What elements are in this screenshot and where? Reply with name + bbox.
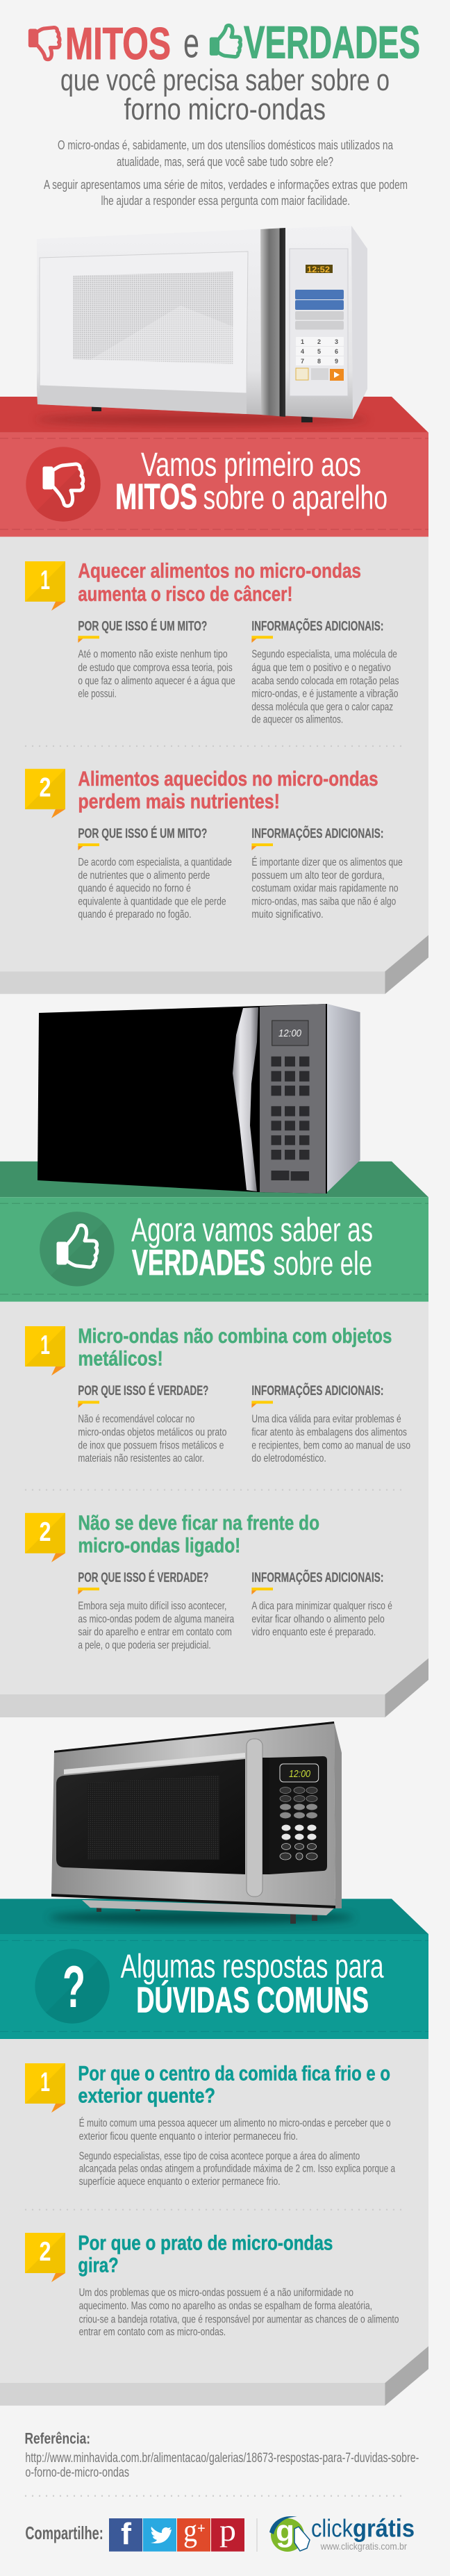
verdade 2: Embora seja muito difícil isso acontecer, (78, 1601, 226, 1612)
title: MITOS (65, 18, 171, 69)
verdade 1: metálicos! (78, 1348, 163, 1370)
mito 2: É importante dizer que os alimentos que (251, 855, 403, 868)
panel: verdades tabletop (0, 1162, 428, 1197)
mito 1: de aquecer os alimentos. (251, 714, 343, 726)
mito 2: equivalente à quantidade que ele perde (78, 895, 226, 907)
badge 2: 2 (39, 1517, 51, 1547)
microwave: white: 4 (301, 348, 304, 355)
mito 1: Aquecer alimentos no micro-ondas (78, 560, 361, 583)
mito 2 (25, 768, 403, 920)
badge 2 (25, 769, 65, 818)
icon: question circle (35, 1949, 110, 2024)
panel: mitos tabletop (0, 397, 428, 433)
panel: duvidas tabletop (0, 1899, 428, 1934)
icon: question circle: ? (62, 1954, 85, 2020)
panel: mitos header band: MITOS (115, 477, 197, 518)
verdade 1: do eletrodoméstico. (251, 1453, 326, 1464)
mito 1: água que tem o positivo e o negativo (251, 662, 391, 674)
title: forno micro-ondas (124, 92, 326, 126)
intro text (44, 138, 408, 208)
logo: clickgratis: g (276, 2514, 294, 2548)
mito 2: perdem mais nutrientes! (78, 790, 280, 813)
verdade 2: vidro enquanto este é preparado. (251, 1626, 376, 1638)
verdade 1: POR QUE ISSO É VERDADE? (78, 1382, 208, 1398)
panel: verdades header band: sobre ele (273, 1246, 372, 1282)
duvida 1: exterior ficou quente enquanto o interior permaneceu frio. (79, 2131, 298, 2142)
badge 1 (25, 1326, 65, 1376)
icon: google plus: + (197, 2521, 206, 2536)
microwave: white: 9 (335, 358, 338, 365)
microwave: white (35, 226, 368, 426)
panel: verdades header band: VERDADES (132, 1243, 265, 1283)
badge 1: 1 (40, 565, 50, 595)
verdade 2: POR QUE ISSO É VERDADE? (78, 1569, 208, 1585)
panel: duvidas content (0, 2039, 428, 2406)
icon: facebook: f (121, 2517, 131, 2551)
verdade 2: A dica para minimizar qualquer risco é (251, 1601, 392, 1612)
mito 1: INFORMAÇÕES ADICIONAIS: (251, 617, 383, 634)
mito 2: possuem um alto teor de gordura, (251, 870, 385, 882)
mito 1: dessa molécula que gera o calor capaz (251, 701, 393, 713)
microwave: white: 3 (335, 338, 338, 345)
mito 2: muito significativo. (251, 909, 324, 920)
verdade 1: Não é recomendável colocar no (78, 1414, 194, 1426)
badge 2 (25, 2233, 65, 2282)
mito 2: costumam oxidar mais rapidamente no (251, 883, 399, 895)
icon: thumb up circle (40, 1212, 115, 1287)
microwave: black: 12:00 (278, 1027, 302, 1039)
intro text: atualidade, mas, será que você sabe tudo sobre ele? (117, 155, 333, 169)
icon: twitter (143, 2518, 176, 2552)
panel: mitos content (0, 537, 428, 994)
badge 1: 1 (40, 2067, 50, 2097)
verdade 2: as mico-ondas podem de alguma maneira (78, 1613, 234, 1625)
badge 2: 2 (39, 773, 51, 803)
mito 1 (25, 560, 399, 726)
microwave: white: 8 (317, 358, 321, 365)
microwave: stainless (49, 1722, 354, 1924)
icon: thumb down circle (26, 447, 101, 522)
share (25, 2513, 244, 2552)
microwave: white: 6 (335, 348, 338, 355)
mito 1: Até o momento não existe nenhum tipo (78, 649, 228, 661)
mito 1: aumenta o risco de câncer! (78, 583, 292, 606)
mito 1: micro-ondas, e é justamente a vibração (251, 688, 398, 700)
microwave: white: 5 (317, 348, 321, 355)
mito 2: quando é aquecido no forno é (78, 883, 191, 895)
mito 1: Segundo especialista, uma molécula de (251, 649, 397, 661)
duvida 1: superfície aquece enquanto o exterior permanece frio. (79, 2176, 281, 2188)
panel: verdades content (0, 1302, 428, 1717)
verdade 1: INFORMAÇÕES ADICIONAIS: (251, 1382, 383, 1398)
mito 1: de estudo que comprova essa teoria, pois (78, 662, 233, 674)
mito 2: quando é preparado no fogão. (78, 909, 192, 920)
mito 2: Alimentos aquecidos no micro-ondas (78, 768, 378, 791)
badge 1 (25, 2063, 65, 2113)
verdade 1: materiais não resistentes ao calor. (78, 1453, 204, 1464)
duvida 2: gira? (78, 2254, 119, 2277)
badge 2: 2 (39, 2237, 51, 2267)
mito 2: INFORMAÇÕES ADICIONAIS: (251, 825, 383, 841)
verdade 2: INFORMAÇÕES ADICIONAIS: (251, 1569, 383, 1585)
duvida 1: exterior quente? (78, 2085, 215, 2108)
panel: mitos header band: Vamos primeiro aos (141, 447, 361, 484)
reference: Referência: (25, 2430, 90, 2447)
duvida 2: entrar em contato com as micro-ondas. (79, 2326, 226, 2338)
microwave: white: 7 (301, 358, 304, 365)
duvida 2 (25, 2231, 399, 2338)
verdade 1 (25, 1325, 410, 1464)
verdade 2: a pele, o que poderia ser prejudicial. (78, 1640, 211, 1651)
mito 1: POR QUE ISSO É UM MITO? (78, 618, 207, 634)
icon: google plus (177, 2513, 210, 2552)
logo: clickgratis: www.clickgratis.com.br (320, 2541, 407, 2552)
verdade 1: micro-ondas objetos metálicos ou prato (78, 1427, 226, 1438)
duvida 2: Por que o prato de micro-ondas (78, 2231, 333, 2254)
badge 2 (25, 1513, 65, 1562)
title (31, 17, 420, 126)
mito 2: De acordo com especialista, a quantidade (78, 857, 232, 868)
icon: google plus: g (183, 2513, 197, 2548)
mito 2: micro-ondas, mas saiba que não é algo (251, 895, 396, 907)
badge 1 (25, 561, 65, 611)
logo: clickgratis: grátis (353, 2514, 415, 2543)
microwave: white: 12:52 (307, 265, 330, 274)
verdade 2: sair do aparelho e entrar em contato com (78, 1626, 232, 1638)
icon: facebook (109, 2517, 142, 2552)
panel: duvidas header band (0, 1934, 428, 2039)
mito 1: acaba sendo colocada em rotação pelas (251, 675, 399, 687)
share: Compartilhe: (25, 2523, 103, 2543)
reference: o-forno-de-micro-ondas (25, 2466, 129, 2480)
microwave: white: 2 (317, 338, 321, 345)
duvida 1 (25, 2062, 395, 2188)
verdade 2 (25, 1512, 392, 1651)
microwave: black (38, 1004, 360, 1194)
verdade 2: Não se deve ficar na frente do (78, 1512, 319, 1535)
intro text: lhe ajudar a responder essa pergunta com maior facilidade. (101, 194, 350, 208)
logo: clickgratis (269, 2514, 415, 2552)
verdade 1: Uma dica válida para evitar problemas é (251, 1414, 401, 1426)
badge 1: 1 (40, 1330, 50, 1360)
panel: mitos header band: sobre o aparelho (203, 480, 388, 517)
microwave: white: 1 (301, 338, 304, 345)
mito 1: o que faz o alimento aquecer é a água que (78, 675, 235, 687)
verdade 2: evitar ficar olhando o alimento pelo (251, 1613, 385, 1625)
icon: thumb down red (31, 28, 60, 60)
reference (25, 2430, 419, 2480)
mito 2: de nutrientes que o alimento perde (78, 870, 210, 882)
panel: mitos header band (0, 433, 428, 537)
verdade 2: micro-ondas ligado! (78, 1534, 240, 1557)
icon: pinterest: p (219, 2513, 236, 2548)
duvida 2: Um dos problemas que os micro-ondas possuem é a não uniformidade no (79, 2287, 353, 2299)
icon: pinterest (211, 2513, 244, 2552)
mito 1: ele possui. (78, 688, 117, 700)
panel: verdades header band (0, 1197, 428, 1302)
logo: clickgratis: click (311, 2514, 353, 2543)
microwave: stainless: 12:00 (289, 1768, 311, 1780)
verdade 1: de inox que possuem frisos metálicos e (78, 1439, 224, 1451)
icon: thumb up green (211, 25, 240, 57)
title: e (183, 19, 199, 67)
mito 2: POR QUE ISSO É UM MITO? (78, 825, 207, 841)
